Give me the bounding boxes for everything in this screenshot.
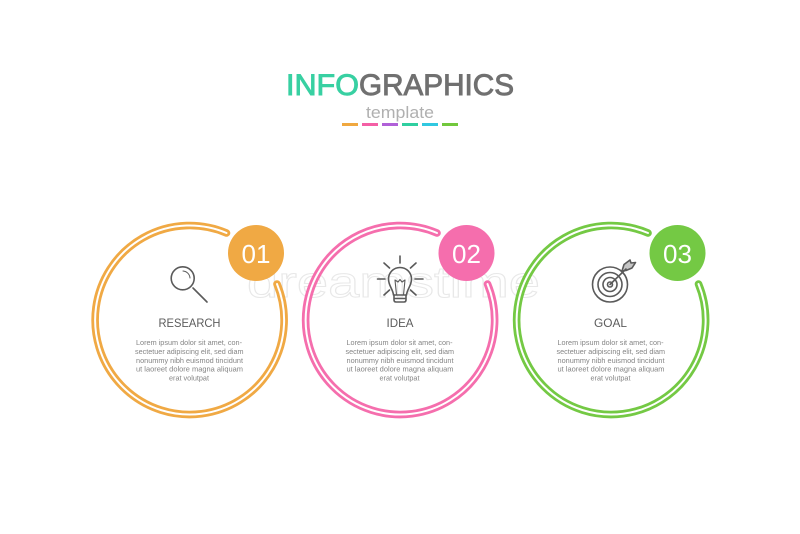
label: research: RESEARCH: [158, 316, 220, 330]
ring: research: [95, 226, 284, 415]
text: goal: sectetuer adipiscing elit, sed diam: [556, 347, 665, 356]
text: idea: Lorem ipsum dolor sit amet, con-: [346, 338, 453, 347]
text: research: sectetuer adipiscing elit, sed diam: [135, 347, 244, 356]
ring: goal: [517, 226, 706, 415]
text: research: [135, 338, 244, 382]
text: idea: nonummy nibh euismod tincidunt: [346, 356, 454, 365]
icon: light bulb: [378, 256, 423, 302]
badge: 03: [650, 225, 706, 281]
watermark: dreamstime: [247, 258, 540, 307]
badge: 02: [438, 225, 494, 281]
icon: magnifier: [171, 267, 207, 302]
text: idea: [346, 338, 454, 382]
text: research: Lorem ipsum dolor sit amet, con-: [136, 338, 242, 347]
text: idea: ut laoreet dolore magna aliquam: [346, 364, 454, 374]
title: INFO: [286, 69, 359, 102]
text: goal: Lorem ipsum dolor sit amet, con-: [558, 338, 664, 347]
text: goal: [556, 338, 665, 382]
text: research: erat volutpat: [169, 374, 210, 382]
badge: 03: 03: [663, 239, 692, 269]
panel: idea: [306, 225, 495, 415]
icon: target: [592, 260, 636, 302]
title: GRAPHICS: [359, 69, 514, 102]
text: goal: nonummy nibh euismod tincidunt: [558, 356, 665, 365]
text: research: nonummy nibh euismod tincidunt: [136, 356, 244, 365]
title: [286, 69, 514, 102]
colour bars: [342, 123, 458, 126]
text: goal: ut laoreet dolore magna aliquam: [558, 364, 664, 374]
badge: 01: [228, 225, 284, 281]
label: goal: GOAL: [594, 316, 627, 330]
label: idea: IDEA: [386, 316, 414, 330]
text: idea: erat volutpat: [380, 374, 420, 382]
text: research: ut laoreet dolore magna aliquam: [136, 364, 243, 374]
badge: 01: 01: [242, 239, 270, 269]
subtitle: template: [366, 103, 434, 122]
badge: 02: 02: [452, 239, 481, 269]
panel: goal: [517, 225, 706, 415]
panel: research: [95, 225, 284, 415]
text: idea: sectetuer adipiscing elit, sed diam: [346, 347, 454, 356]
text: goal: erat volutpat: [590, 374, 631, 382]
ring: idea: [306, 226, 495, 415]
